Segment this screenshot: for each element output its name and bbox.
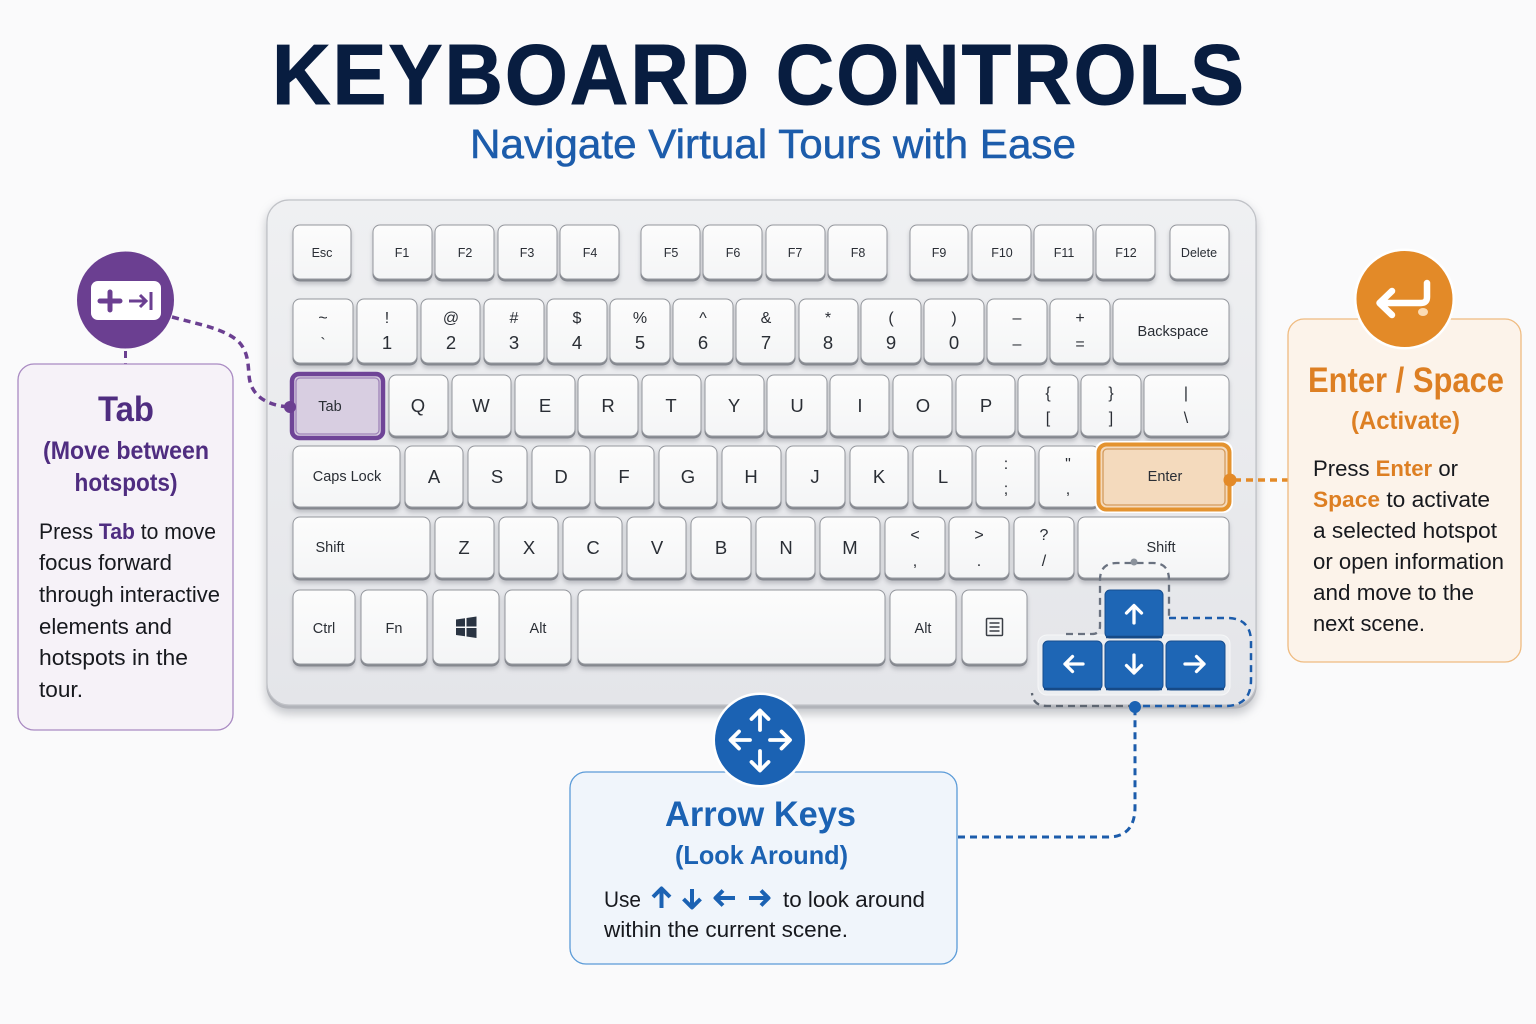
QWERTY key row: Y: [728, 395, 740, 416]
text: Tab description: [39, 519, 220, 702]
subheading: Move between hotspots: (Move between: [43, 437, 209, 465]
home key row: ;: [1004, 481, 1008, 498]
icon: Enter badge: [1354, 248, 1455, 350]
text: Arrow description: to look around: [783, 887, 925, 912]
arrow key cluster: [1038, 590, 1230, 695]
function key row: F11: [1054, 246, 1074, 260]
panel: Arrow Keys: [570, 772, 957, 964]
shift key row: N: [779, 537, 793, 558]
text: Enter description: [1313, 456, 1504, 636]
QWERTY key row: Q: [411, 395, 425, 416]
connector: Tab icon to Tab key: [126, 317, 296, 413]
icon: windows logo: [456, 616, 476, 638]
home key row: H: [744, 466, 758, 487]
text: Enter description: a selected hotspot: [1313, 518, 1497, 543]
function key row: F8: [851, 246, 865, 260]
connector: arrow cluster outline: [1032, 558, 1251, 706]
shift key row: Z: [458, 537, 470, 558]
bottom key row: Ctrl: [313, 621, 335, 637]
icons: inline arrows: [653, 888, 769, 908]
shift key row: .: [977, 553, 981, 570]
function key row: F1: [395, 246, 409, 260]
QWERTY key row: W: [472, 395, 490, 416]
home key row: [293, 446, 1099, 507]
subheading: Move between hotspots: [43, 437, 209, 497]
function key row: F9: [932, 246, 946, 260]
heading: Tab: Tab: [98, 390, 154, 429]
shift key row: ,: [913, 553, 917, 570]
text: Arrow description: Use: [604, 887, 641, 912]
panel: Tab: [18, 364, 233, 730]
number key row: 8: [823, 332, 833, 353]
number key row: ): [951, 310, 957, 327]
text: Tab description: hotspots in the: [39, 645, 188, 670]
number key row: +: [1075, 310, 1085, 327]
number key row: Backspace: [1138, 324, 1208, 340]
highlighted Enter key: Enter: [1148, 469, 1182, 485]
shift key row: >: [974, 527, 984, 544]
bottom key row: [293, 590, 1027, 664]
text: Arrow description: [603, 887, 925, 942]
number key row: ~: [318, 310, 328, 327]
home key row: ,: [1066, 481, 1070, 498]
number key row: `: [320, 336, 326, 353]
number key row: 3: [509, 332, 519, 353]
heading: Arrow Keys: Arrow Keys: [665, 795, 856, 834]
QWERTY key row: {: [1045, 385, 1051, 402]
QWERTY key row: }: [1108, 385, 1114, 402]
highlighted Enter key: [1095, 441, 1233, 513]
shift key row: Shift: [1146, 540, 1176, 556]
text: Enter description: Space to activate: [1313, 487, 1490, 512]
shift key row: B: [715, 537, 727, 558]
home key row: A: [428, 466, 441, 487]
function key row: F2: [458, 246, 472, 260]
number key row: [293, 299, 1229, 363]
shift key row: Shift: [315, 540, 345, 556]
bottom key row: Alt: [530, 621, 546, 637]
connector: arrow keys to card: [958, 701, 1141, 837]
function key row: F6: [726, 246, 740, 260]
home key row: G: [681, 466, 695, 487]
QWERTY key row: \: [1184, 410, 1189, 427]
home key row: K: [873, 466, 886, 487]
shift key row: <: [910, 527, 920, 544]
number key row: @: [443, 310, 459, 327]
home key row: D: [554, 466, 568, 487]
icon: Tab badge: [77, 252, 174, 348]
QWERTY key row: |: [1184, 385, 1188, 402]
title: KEYBOARD CONTROLS: [272, 27, 1244, 122]
number key row: –: [1013, 336, 1022, 353]
function key row: F12: [1115, 246, 1137, 260]
function key row: F4: [583, 246, 597, 260]
number key row: (: [888, 310, 894, 327]
number key row: 2: [446, 332, 456, 353]
function key row: F10: [991, 246, 1013, 260]
QWERTY key row: [389, 375, 1229, 436]
keyboard body: [267, 200, 1256, 705]
home key row: J: [810, 466, 820, 487]
panel: Enter / Space: [1288, 319, 1521, 662]
function key row: F7: [788, 246, 802, 260]
number key row: –: [1013, 310, 1022, 327]
QWERTY key row: I: [857, 395, 863, 416]
subheading: Activate: (Activate): [1351, 407, 1460, 435]
number key row: ^: [699, 310, 707, 327]
home key row: L: [938, 466, 948, 487]
number key row: 7: [761, 332, 771, 353]
QWERTY key row: T: [665, 395, 677, 416]
number key row: *: [825, 310, 831, 327]
number key row: !: [385, 310, 389, 327]
number key row: #: [510, 310, 519, 327]
text: Tab description: elements and: [39, 614, 172, 639]
text: Arrow description: within the current scene.: [603, 917, 848, 942]
QWERTY key row: ]: [1109, 410, 1113, 427]
home key row: ": [1065, 456, 1071, 473]
shift key row: C: [586, 537, 600, 558]
icon: Arrow badge: [712, 692, 808, 788]
text: Tab description: tour.: [39, 677, 83, 702]
number key row: $: [573, 310, 582, 327]
text: Enter description: and move to the: [1313, 580, 1474, 605]
text: Enter description: or open information: [1313, 549, 1504, 574]
function key row: [293, 225, 1229, 279]
home key row: Caps Lock: [313, 469, 382, 485]
bottom key row: Fn: [386, 621, 402, 637]
number key row: 4: [572, 332, 582, 353]
text: Tab description: focus forward: [39, 550, 172, 575]
QWERTY key row: E: [539, 395, 551, 416]
number key row: 1: [382, 332, 392, 353]
number key row: %: [633, 310, 647, 327]
text: Tab description: Press Tab to move: [39, 519, 216, 544]
shift key row: M: [842, 537, 858, 558]
icon: menu key: [986, 618, 1002, 636]
number key row: 6: [698, 332, 708, 353]
connector: Enter key to card: [1224, 474, 1288, 486]
shift key row: /: [1042, 553, 1047, 570]
subheading: Move between hotspots: hotspots): [74, 469, 178, 497]
keyboard: [267, 200, 1256, 705]
QWERTY key row: [: [1046, 410, 1051, 427]
QWERTY key row: O: [916, 395, 930, 416]
number key row: 0: [949, 332, 959, 353]
heading: Enter / Space: Enter / Space: [1308, 361, 1504, 400]
function key row: Delete: [1181, 246, 1217, 260]
function key row: Esc: [312, 246, 332, 260]
number key row: =: [1075, 336, 1085, 353]
shift key row: ?: [1040, 527, 1049, 544]
home key row: S: [491, 466, 503, 487]
function key row: F5: [664, 246, 678, 260]
subheading: Look Around: (Look Around): [675, 840, 848, 870]
shift key row: [293, 517, 1229, 578]
highlighted Tab key: [292, 374, 383, 438]
number key row: 5: [635, 332, 645, 353]
QWERTY key row: U: [790, 395, 804, 416]
shift key row: X: [523, 537, 535, 558]
text: Enter description: next scene.: [1313, 611, 1425, 636]
QWERTY key row: R: [601, 395, 615, 416]
number key row: 9: [886, 332, 896, 353]
highlighted Tab key: Tab: [318, 399, 342, 415]
text: Enter description: Press Enter or: [1313, 456, 1458, 481]
function key row: F3: [520, 246, 534, 260]
shift key row: V: [651, 537, 664, 558]
number key row: &: [761, 310, 772, 327]
subtitle: Navigate Virtual Tours with Ease: [470, 121, 1076, 167]
text: Tab description: through interactive: [39, 582, 220, 607]
home key row: F: [618, 466, 630, 487]
QWERTY key row: P: [980, 395, 992, 416]
bottom key row: Alt: [915, 621, 931, 637]
home key row: :: [1004, 456, 1008, 473]
